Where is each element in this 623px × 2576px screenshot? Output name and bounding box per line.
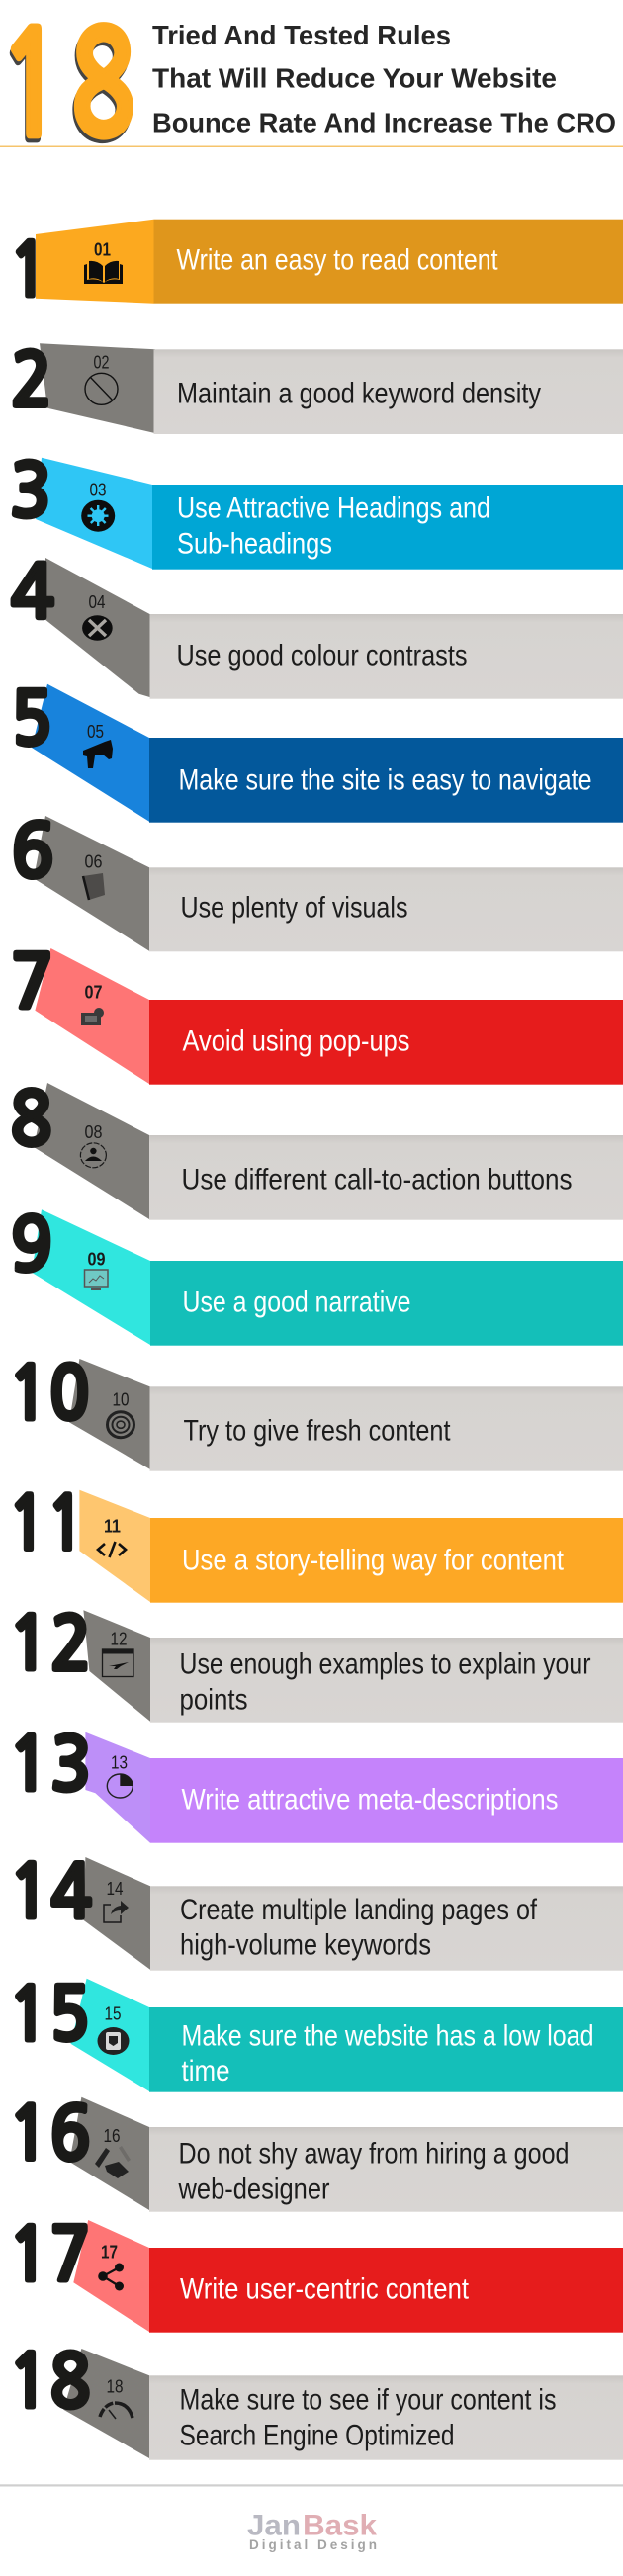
icon: target bbox=[107, 1412, 134, 1438]
small number: 10 bbox=[113, 1390, 129, 1410]
flap bbox=[69, 1359, 150, 1469]
flap bbox=[34, 1083, 149, 1219]
text bbox=[182, 2019, 593, 2087]
text: high-volume keywords bbox=[180, 1929, 431, 1962]
bar bbox=[149, 2127, 623, 2212]
icon: window with plane bbox=[103, 1649, 134, 1677]
small number: 16 bbox=[103, 2126, 121, 2146]
text: Write an easy to read content bbox=[176, 244, 498, 277]
small number: 13 bbox=[111, 1752, 128, 1772]
panel: rule 16 bbox=[8, 2097, 623, 2212]
big number 18: 8 bbox=[70, 14, 135, 157]
big number: 4 bbox=[10, 557, 55, 630]
big number: 12 bbox=[8, 1608, 92, 1681]
panel: rule 18 bbox=[8, 2347, 623, 2460]
bar bbox=[150, 1261, 623, 1346]
panel: rule 9 bbox=[10, 1209, 623, 1346]
bar bbox=[150, 1758, 623, 1843]
flap bbox=[45, 558, 150, 697]
big number: 11 bbox=[8, 1488, 85, 1561]
bar bbox=[150, 1386, 623, 1471]
small number: 02 bbox=[93, 353, 109, 373]
bar bbox=[149, 1135, 623, 1220]
text bbox=[180, 2384, 556, 2452]
small number: 15 bbox=[105, 2004, 121, 2024]
small number: 06 bbox=[85, 852, 103, 872]
big number: 2 bbox=[10, 345, 53, 418]
text: Use a story-telling way for content bbox=[182, 1544, 565, 1576]
flap bbox=[34, 816, 149, 951]
big number 18 bbox=[0, 14, 135, 161]
text: Make sure to see if your content is bbox=[180, 2384, 556, 2417]
text: Use plenty of visuals bbox=[180, 891, 407, 924]
flap bbox=[36, 220, 154, 304]
big number: 18 bbox=[8, 2347, 91, 2420]
panel: rule 11 bbox=[8, 1488, 623, 1603]
text: points bbox=[180, 1683, 247, 1716]
title: Bounce Rate And Increase The CRO bbox=[152, 107, 616, 137]
small number: 08 bbox=[85, 1122, 103, 1142]
big number: 3 bbox=[10, 455, 51, 528]
icon: share arrow bbox=[104, 1901, 129, 1922]
text bbox=[178, 2137, 570, 2205]
flap bbox=[69, 2097, 149, 2210]
icon: disc with phone bbox=[97, 2027, 129, 2055]
text: Use good colour contrasts bbox=[176, 640, 467, 672]
small number: 05 bbox=[87, 722, 104, 742]
footer logo: Digital Design bbox=[249, 2537, 377, 2552]
panel: rule 4 bbox=[10, 557, 623, 699]
bar bbox=[150, 1638, 623, 1723]
small number: 07 bbox=[85, 982, 103, 1002]
bar bbox=[150, 1518, 623, 1603]
bar bbox=[150, 1886, 623, 1971]
big number 18: 1 bbox=[0, 18, 62, 161]
big number: 6 bbox=[11, 816, 54, 889]
text bbox=[177, 491, 490, 560]
small number: 17 bbox=[101, 2242, 118, 2262]
bar bbox=[154, 349, 623, 434]
icon: prohibited circle bbox=[85, 373, 118, 404]
icon: video camera bbox=[81, 1008, 104, 1025]
panel: rule 8 bbox=[10, 1083, 623, 1220]
panel: rule 1 bbox=[9, 220, 623, 309]
icon: code brackets bbox=[98, 1542, 126, 1557]
flap bbox=[35, 948, 149, 1084]
text: Use a good narrative bbox=[182, 1287, 411, 1319]
flap bbox=[85, 1732, 150, 1843]
icon: gauge bbox=[100, 2403, 133, 2419]
panel: rule 2 bbox=[10, 343, 623, 434]
big number: 9 bbox=[10, 1209, 53, 1283]
panel: rule 15 bbox=[8, 1979, 623, 2092]
icon: tablet bbox=[83, 873, 105, 900]
icon: target with person bbox=[80, 1143, 106, 1168]
small number: 01 bbox=[94, 239, 111, 259]
text: Search Engine Optimized bbox=[180, 2420, 455, 2452]
title bbox=[152, 20, 616, 137]
bar bbox=[149, 2007, 623, 2092]
flap bbox=[36, 458, 152, 569]
panel: rule 13 bbox=[8, 1729, 623, 1843]
panel: rule 5 bbox=[11, 684, 623, 823]
big number 18: 1 bbox=[0, 14, 63, 157]
big number: 10 bbox=[8, 1358, 90, 1431]
small number: 04 bbox=[89, 592, 105, 612]
flap bbox=[32, 1209, 150, 1345]
text: Use different call-to-action buttons bbox=[182, 1164, 572, 1197]
small number: 18 bbox=[107, 2376, 123, 2396]
flap bbox=[83, 1610, 150, 1722]
small number: 12 bbox=[111, 1629, 127, 1648]
title: Tried And Tested Rules bbox=[152, 20, 451, 50]
footer logo: Jan bbox=[247, 2509, 301, 2541]
text: Create multiple landing pages of bbox=[180, 1894, 538, 1926]
text: Write attractive meta-descriptions bbox=[182, 1783, 558, 1816]
text: Write user-centric content bbox=[180, 2272, 470, 2305]
icon: share nodes bbox=[98, 2263, 124, 2290]
big number: 5 bbox=[11, 684, 52, 757]
bar bbox=[154, 220, 623, 304]
text: web-designer bbox=[178, 2173, 330, 2205]
bar bbox=[152, 485, 623, 570]
flap bbox=[63, 2349, 149, 2458]
panel: rule 6 bbox=[11, 816, 623, 951]
icon: megaphone bbox=[83, 740, 113, 768]
small number: 09 bbox=[87, 1249, 105, 1269]
panel: rule 14 bbox=[8, 1857, 623, 1971]
icon: disc with tools bbox=[82, 615, 113, 641]
bar bbox=[149, 1000, 623, 1085]
text: Avoid using pop-ups bbox=[182, 1024, 409, 1057]
text: Try to give fresh content bbox=[184, 1415, 451, 1448]
panel: rule 17 bbox=[8, 2219, 623, 2333]
text bbox=[180, 1894, 538, 1962]
text bbox=[180, 1648, 591, 1716]
header bbox=[0, 14, 616, 161]
bar bbox=[149, 2248, 623, 2333]
small number: 03 bbox=[89, 481, 107, 500]
flap bbox=[40, 343, 155, 433]
big number: 7 bbox=[10, 947, 53, 1021]
icon: open book bbox=[84, 261, 123, 284]
icon: handshake bbox=[95, 2146, 131, 2178]
big number: 15 bbox=[8, 1980, 90, 2053]
title: That Will Reduce Your Website bbox=[152, 62, 557, 93]
big number: 16 bbox=[8, 2098, 91, 2172]
flap bbox=[79, 1490, 150, 1602]
footer logo bbox=[247, 2509, 377, 2552]
big number: 13 bbox=[8, 1729, 92, 1802]
text: Use Attractive Headings and bbox=[177, 491, 490, 524]
panel: rule 12 bbox=[8, 1608, 623, 1723]
small number: 14 bbox=[107, 1879, 123, 1899]
text: Maintain a good keyword density bbox=[177, 377, 541, 409]
flap bbox=[71, 1979, 149, 2091]
bar bbox=[150, 614, 623, 699]
big number: 14 bbox=[8, 1857, 93, 1930]
bar bbox=[149, 2375, 623, 2460]
text: Sub-headings bbox=[177, 527, 332, 560]
bar bbox=[149, 867, 623, 951]
panel: rule 10 bbox=[8, 1358, 623, 1471]
footer logo: Bask bbox=[303, 2509, 377, 2541]
bar bbox=[149, 738, 623, 823]
panel: rule 3 bbox=[10, 455, 623, 570]
panel: rule 7 bbox=[10, 947, 623, 1085]
flap bbox=[32, 684, 149, 822]
small number: 11 bbox=[104, 1516, 121, 1536]
flap bbox=[83, 1857, 150, 1970]
icon: monitor bbox=[85, 1270, 108, 1290]
text: time bbox=[182, 2055, 229, 2087]
big number 18: 8 bbox=[69, 18, 134, 160]
icon: disc with star bbox=[81, 500, 115, 532]
flap bbox=[73, 2220, 149, 2332]
big number: 17 bbox=[8, 2219, 91, 2292]
big number: 8 bbox=[10, 1084, 52, 1157]
icon: clock bbox=[107, 1774, 133, 1798]
big number: 1 bbox=[9, 235, 48, 309]
